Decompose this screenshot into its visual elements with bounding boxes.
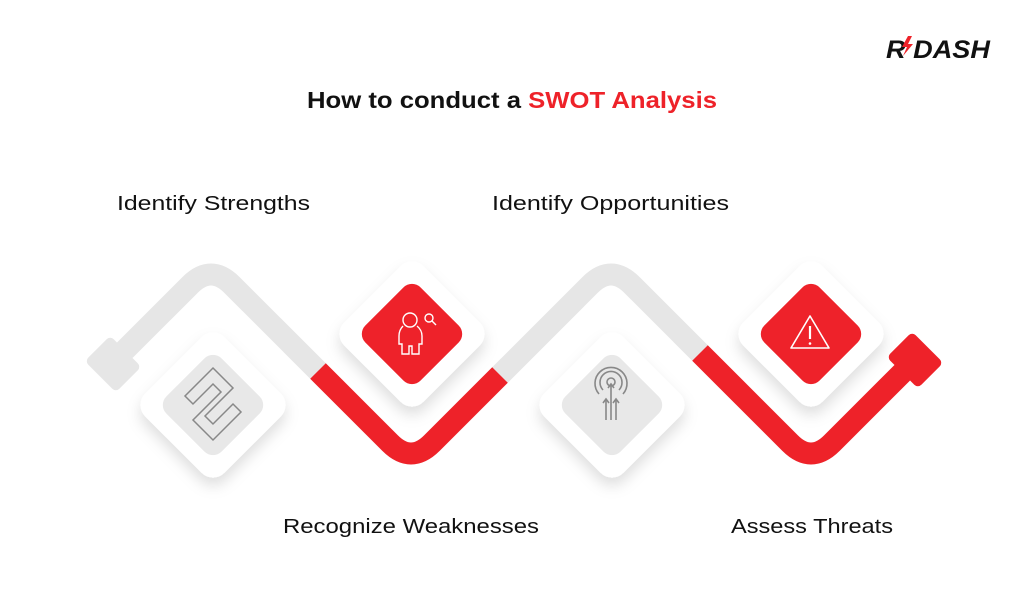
label: Identify Opportunities: Identify Opportunities: [492, 193, 729, 215]
card: threats icon: [732, 255, 890, 413]
logo: RDASH: R DASH: [886, 36, 991, 64]
title: How to conduct a SWOT Analysis: [307, 87, 717, 113]
label: Assess Threats: Assess Threats: [731, 516, 893, 538]
zigzag path: [85, 274, 943, 454]
card: weaknesses icon: [333, 255, 491, 413]
label: Recognize Weaknesses: Recognize Weaknesses: [283, 516, 539, 538]
label: Identify Strengths: Identify Strengths: [117, 193, 310, 215]
card: strengths icon: [134, 326, 292, 484]
card: opportunities icon: [533, 326, 691, 484]
